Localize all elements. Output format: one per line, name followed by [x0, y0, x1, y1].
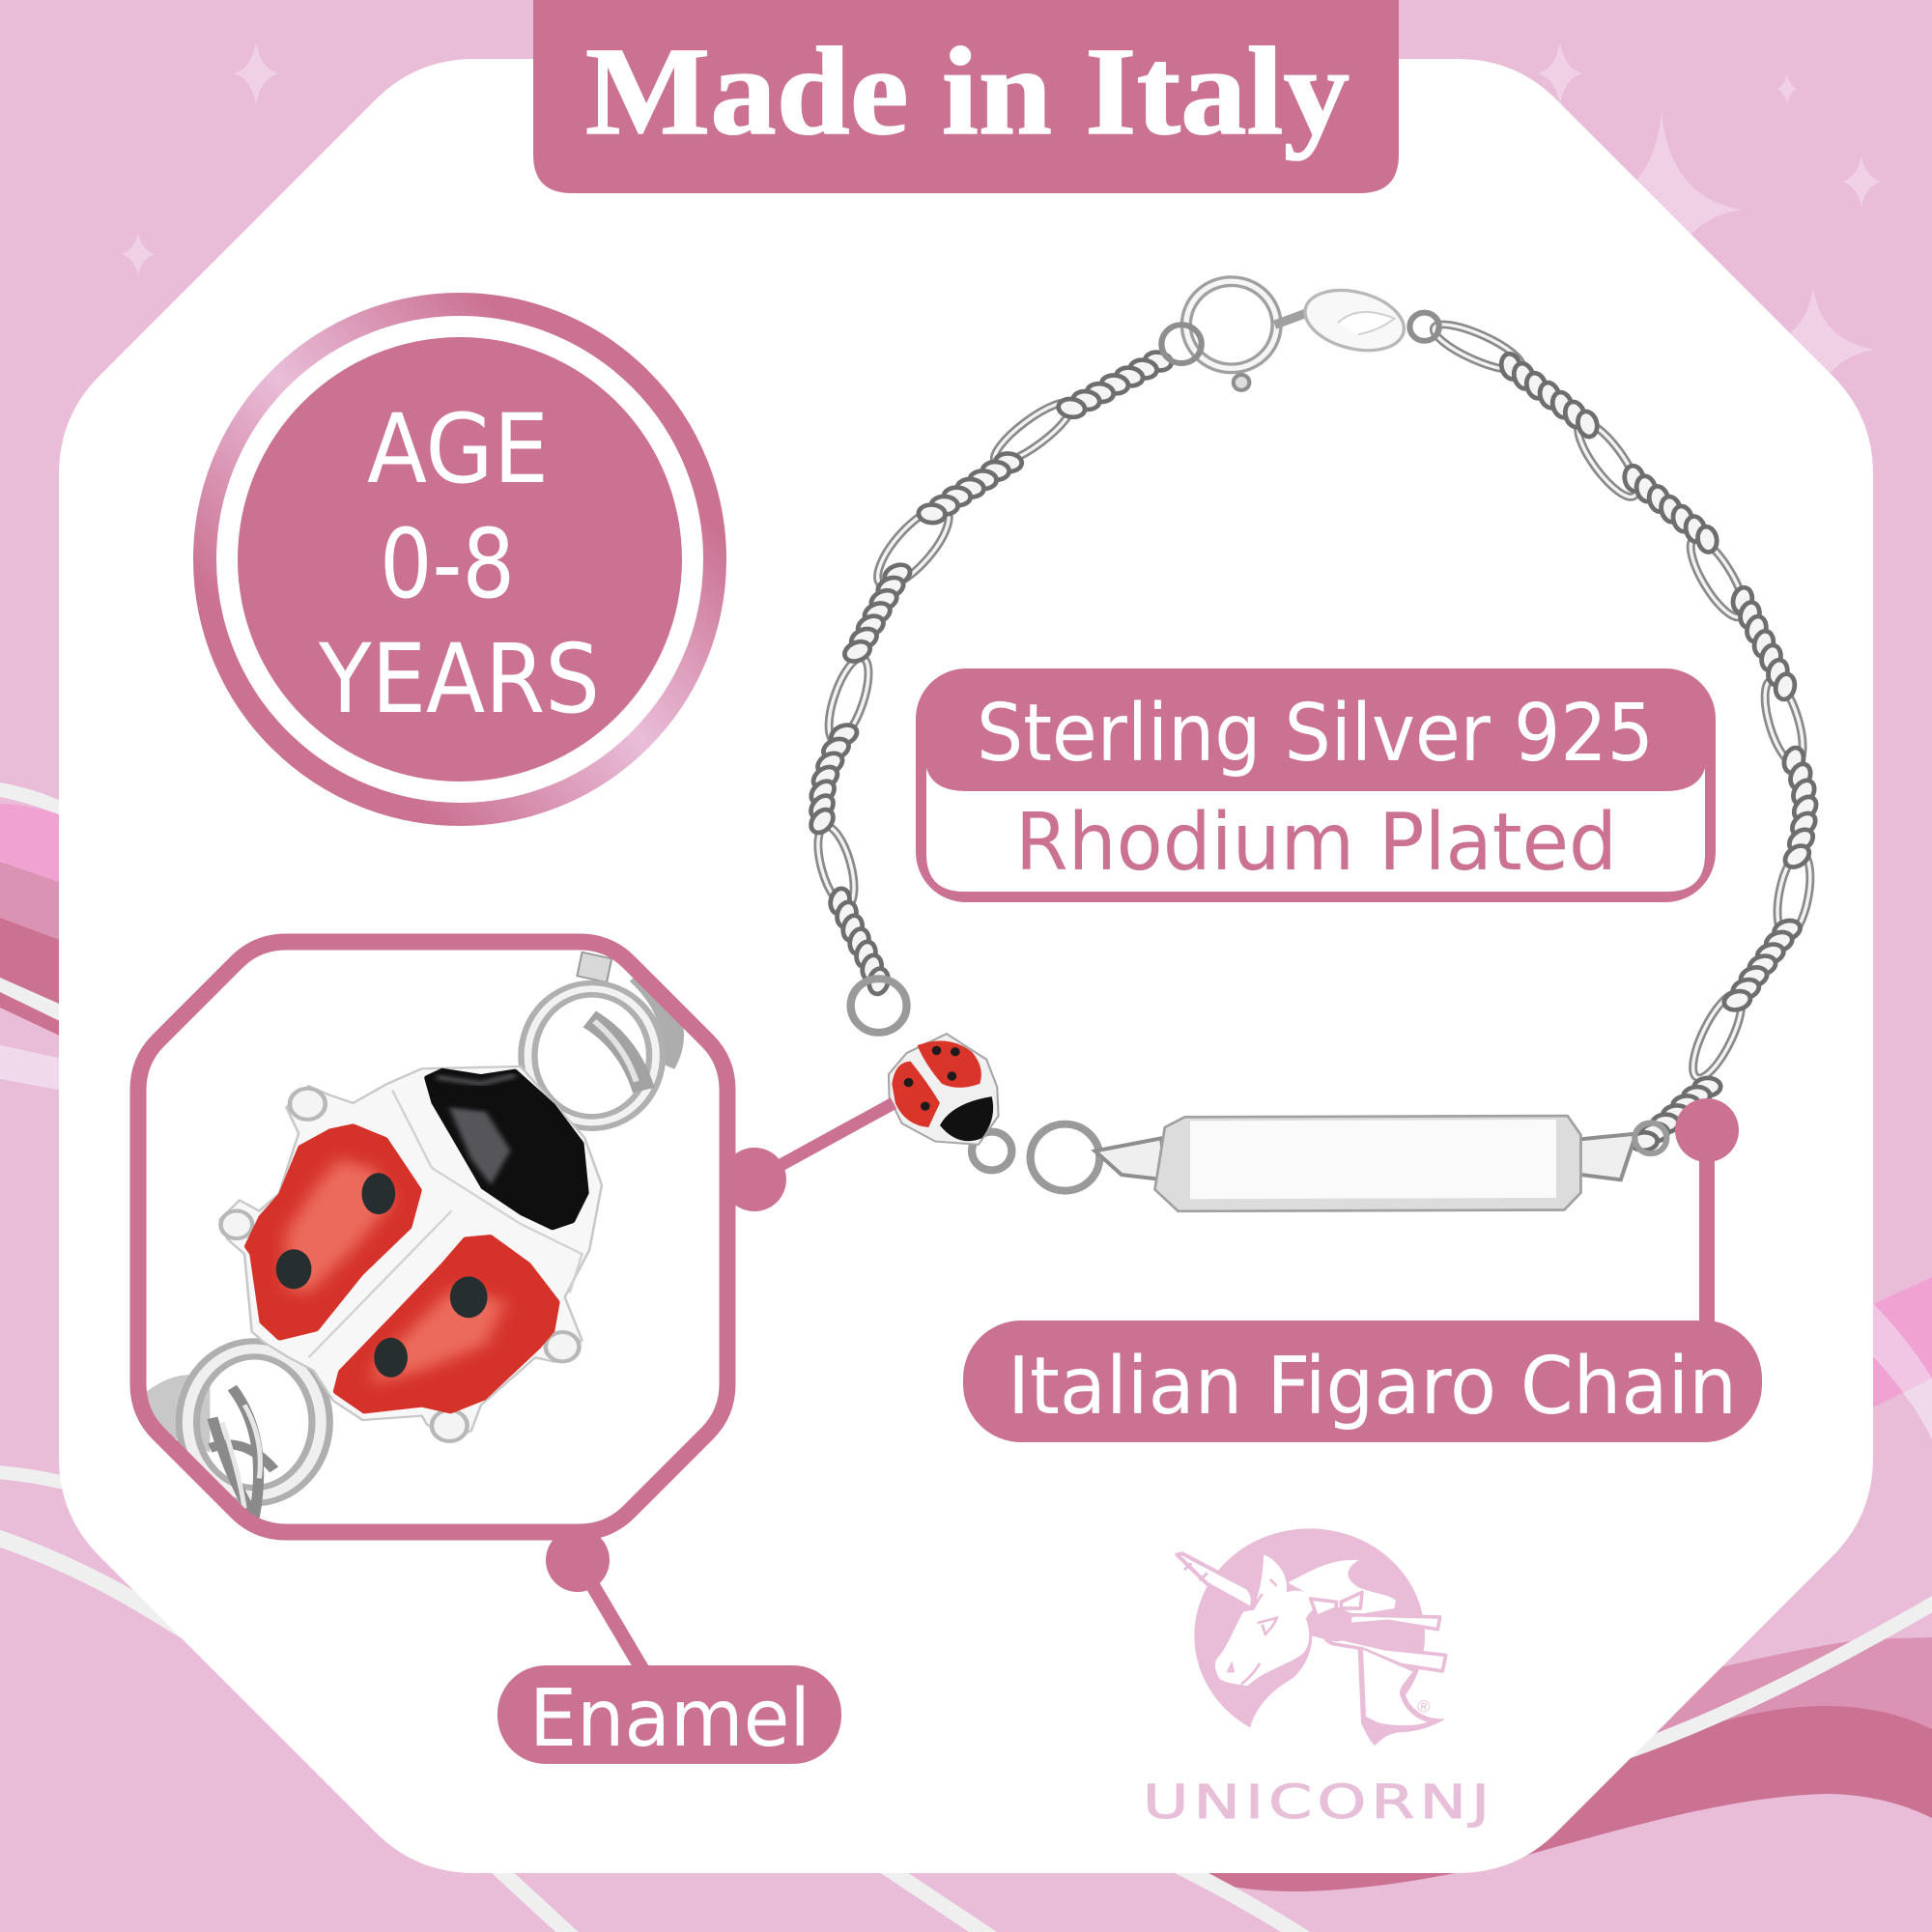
silver body	[220, 1066, 602, 1439]
chain long links	[810, 316, 1816, 1084]
sterling silver text: Sterling Silver 925	[977, 688, 1654, 780]
antennae knobs	[221, 1089, 579, 1441]
close-up photo	[146, 952, 671, 1517]
material label	[916, 668, 1716, 902]
red wing left	[248, 1127, 418, 1337]
ribbon bow and tails	[1311, 1592, 1446, 1671]
wing spots	[276, 1173, 488, 1378]
age text: AGE	[367, 394, 549, 505]
face details	[1229, 1579, 1277, 1684]
ladybug charm rings	[851, 979, 1099, 1191]
outer gradient ring	[205, 304, 715, 814]
horn	[1177, 1553, 1253, 1608]
octagon frame	[138, 942, 727, 1532]
connector: close-up to charm	[723, 1103, 894, 1211]
ladybug close-up	[138, 942, 727, 1532]
title banner	[533, 0, 1399, 193]
connector: close-up to enamel label	[546, 1528, 643, 1671]
upper ring	[527, 952, 671, 1122]
logo disc	[1194, 1528, 1425, 1743]
left background waves	[0, 782, 251, 1671]
registered mark: ®	[1417, 1697, 1431, 1717]
red wing right	[337, 1238, 556, 1410]
age badge	[205, 304, 715, 814]
rhodium plated text: Rhodium Plated	[1015, 797, 1617, 889]
logo: unicorn	[1177, 1528, 1446, 1748]
inner disc	[238, 337, 682, 781]
label: Enamel: Enamel	[529, 1673, 810, 1765]
head	[1215, 1554, 1321, 1686]
age text	[318, 394, 600, 735]
label: Italian Figaro Chain: Italian Figaro Chain	[1008, 1341, 1737, 1433]
flowing hair	[1360, 1649, 1436, 1742]
mane	[1288, 1560, 1396, 1615]
logo wordmark: UNICORNJ	[1143, 1776, 1490, 1830]
age text: 0-8	[380, 509, 515, 620]
chain link highlights	[810, 316, 1816, 1084]
black head	[428, 1071, 585, 1227]
bracelet	[810, 280, 1816, 1211]
bottom background waves	[483, 1277, 1932, 1932]
neck	[1248, 1635, 1372, 1748]
chain curb links	[822, 361, 1805, 1142]
age text: YEARS	[318, 624, 600, 735]
body shading	[308, 1091, 582, 1357]
connector: chain callout	[1675, 1098, 1739, 1333]
clasp	[1161, 280, 1439, 390]
background sparkles	[122, 43, 1881, 415]
lower ring	[146, 1349, 321, 1517]
small ladybug	[889, 1034, 999, 1145]
title text: Made in Italy	[585, 22, 1350, 161]
ID plate	[1094, 1116, 1666, 1211]
